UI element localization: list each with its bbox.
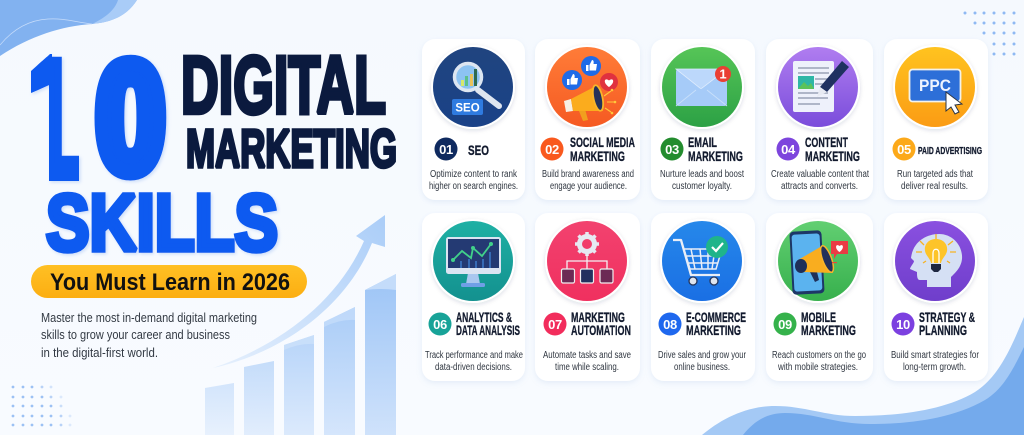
number badge 02 bbox=[540, 138, 564, 160]
intro paragraph: skills to grow your career and business bbox=[41, 328, 230, 342]
icon: shopping cart bbox=[660, 219, 744, 303]
description bbox=[542, 169, 634, 192]
description bbox=[543, 350, 631, 373]
card 01 SEO bbox=[422, 39, 525, 200]
description bbox=[772, 350, 866, 373]
description: Drive sales and grow your bbox=[658, 350, 747, 361]
number badge 06 bbox=[428, 312, 452, 336]
number badge 03 bbox=[660, 138, 684, 160]
icon: email envelope: 1 bbox=[719, 66, 727, 82]
heading: PLANNING bbox=[919, 322, 967, 338]
description: online business. bbox=[674, 362, 730, 373]
icon: head with light bulb bbox=[893, 219, 977, 303]
description: customer loyalty. bbox=[672, 181, 732, 192]
title MARKETING: MARKETING bbox=[186, 119, 397, 179]
description: time while scaling. bbox=[555, 362, 619, 373]
icon: social megaphone bbox=[545, 45, 629, 129]
number badge 08 bbox=[658, 312, 682, 336]
heading bbox=[686, 309, 746, 338]
dot grid top right bbox=[964, 12, 1016, 56]
icon: SEO magnifier: SEO bbox=[455, 102, 480, 114]
intro paragraph: Master the most in-demand digital marketing bbox=[41, 311, 257, 325]
description: data-driven decisions. bbox=[435, 362, 512, 373]
description: higher on search engines. bbox=[429, 181, 518, 192]
number badge 05: 05 bbox=[897, 142, 911, 157]
description: Track performance and make bbox=[425, 350, 523, 361]
number badge 04 bbox=[776, 138, 800, 160]
heading: MARKETING bbox=[805, 148, 860, 164]
description bbox=[771, 169, 869, 192]
heading: DATA ANALYSIS bbox=[456, 322, 520, 338]
heading: EMAIL bbox=[688, 134, 717, 150]
card 10 Strategy and Planning bbox=[884, 213, 988, 381]
heading: MOBILE bbox=[801, 309, 836, 325]
description bbox=[429, 169, 518, 192]
heading: PAID ADVERTISING bbox=[918, 145, 982, 157]
heading: SOCIAL MEDIA bbox=[570, 134, 635, 150]
description: Run targeted ads that bbox=[897, 169, 973, 180]
description bbox=[897, 169, 973, 192]
heading: AUTOMATION bbox=[571, 322, 631, 338]
heading bbox=[570, 134, 635, 164]
card 05 Paid Advertising bbox=[884, 39, 988, 200]
number badge 01: 01 bbox=[439, 142, 453, 157]
description: Optimize content to rank bbox=[430, 169, 518, 180]
icon: phone with megaphone bbox=[776, 219, 860, 303]
card 07 Marketing Automation bbox=[535, 213, 640, 381]
number badge 08: 08 bbox=[663, 317, 677, 332]
icon: PPC button with cursor: PPC bbox=[919, 76, 951, 95]
icon: gear flowchart bbox=[545, 219, 629, 303]
title number 10 bbox=[31, 54, 169, 184]
number badge 10 bbox=[892, 312, 914, 336]
description: deliver real results. bbox=[901, 181, 968, 192]
icon: analytics monitor bbox=[431, 219, 515, 303]
heading bbox=[456, 309, 520, 338]
growth arrow bbox=[213, 215, 385, 368]
intro paragraph bbox=[41, 311, 257, 360]
description: Automate tasks and save bbox=[543, 350, 631, 361]
heading bbox=[801, 309, 856, 338]
description: Build smart strategies for bbox=[891, 350, 980, 361]
heading: ANALYTICS & bbox=[456, 309, 512, 325]
title SKILLS: SKILLS bbox=[46, 178, 278, 267]
decorative top-left wave bbox=[0, 0, 137, 56]
heading: MARKETING bbox=[688, 148, 743, 164]
number badge 06: 06 bbox=[433, 317, 447, 332]
heading: MARKETING bbox=[571, 309, 625, 325]
description bbox=[660, 169, 744, 192]
number badge 02: 02 bbox=[545, 142, 559, 157]
description: Nurture leads and boost bbox=[660, 169, 744, 180]
card 09 Mobile Marketing bbox=[766, 213, 873, 381]
icon: SEO magnifier bbox=[431, 45, 515, 129]
description: Create valuable content that bbox=[771, 169, 869, 180]
description bbox=[891, 350, 980, 373]
description: Reach customers on the go bbox=[772, 350, 866, 361]
description: with mobile strategies. bbox=[777, 362, 858, 373]
number badge 03: 03 bbox=[665, 142, 679, 157]
description: attracts and converts. bbox=[781, 181, 858, 192]
heading bbox=[571, 309, 631, 338]
card 03 Email Marketing bbox=[651, 39, 755, 200]
description: Build brand awareness and bbox=[542, 169, 634, 180]
heading: SEO bbox=[468, 142, 489, 158]
icon: email envelope bbox=[660, 45, 744, 129]
number badge 05 bbox=[892, 138, 916, 160]
heading: MARKETING bbox=[801, 322, 856, 338]
number badge 07: 07 bbox=[548, 317, 562, 332]
number badge 01 bbox=[434, 138, 458, 160]
card 02 Social Media Marketing bbox=[535, 39, 640, 200]
heading: STRATEGY & bbox=[919, 309, 975, 325]
card 08 E-commerce Marketing bbox=[651, 213, 755, 381]
heading bbox=[688, 134, 743, 164]
description: engage your audience. bbox=[550, 181, 627, 192]
bar chart growth graphic bbox=[205, 274, 396, 435]
decorative bottom-right wave bbox=[702, 317, 1024, 435]
description bbox=[658, 350, 747, 373]
heading bbox=[805, 134, 860, 164]
card 06 Analytics bbox=[422, 213, 525, 381]
number badge 10: 10 bbox=[896, 317, 910, 332]
heading bbox=[919, 309, 975, 338]
heading: MARKETING bbox=[570, 148, 625, 164]
heading: E-COMMERCE bbox=[686, 309, 746, 325]
number badge 04: 04 bbox=[781, 142, 796, 157]
intro paragraph: in the digital-first world. bbox=[41, 346, 158, 360]
title DIGITAL: DIGITAL bbox=[181, 40, 386, 131]
subtitle pill: You Must Learn in 2026 bbox=[50, 269, 290, 296]
title number 10: 1 bbox=[0, 24, 88, 213]
heading: CONTENT bbox=[805, 134, 848, 150]
description bbox=[425, 350, 523, 373]
heading: MARKETING bbox=[686, 322, 741, 338]
dot grid bottom left bbox=[12, 386, 71, 426]
number badge 09 bbox=[774, 312, 796, 336]
icon: document and pen bbox=[776, 45, 860, 129]
title number 10: 0 bbox=[96, 31, 165, 204]
card 04 Content Marketing bbox=[766, 39, 873, 200]
icon: PPC button with cursor bbox=[893, 45, 977, 129]
description: long-term growth. bbox=[903, 362, 966, 373]
number badge 09: 09 bbox=[778, 317, 792, 332]
number badge 07 bbox=[544, 312, 566, 336]
